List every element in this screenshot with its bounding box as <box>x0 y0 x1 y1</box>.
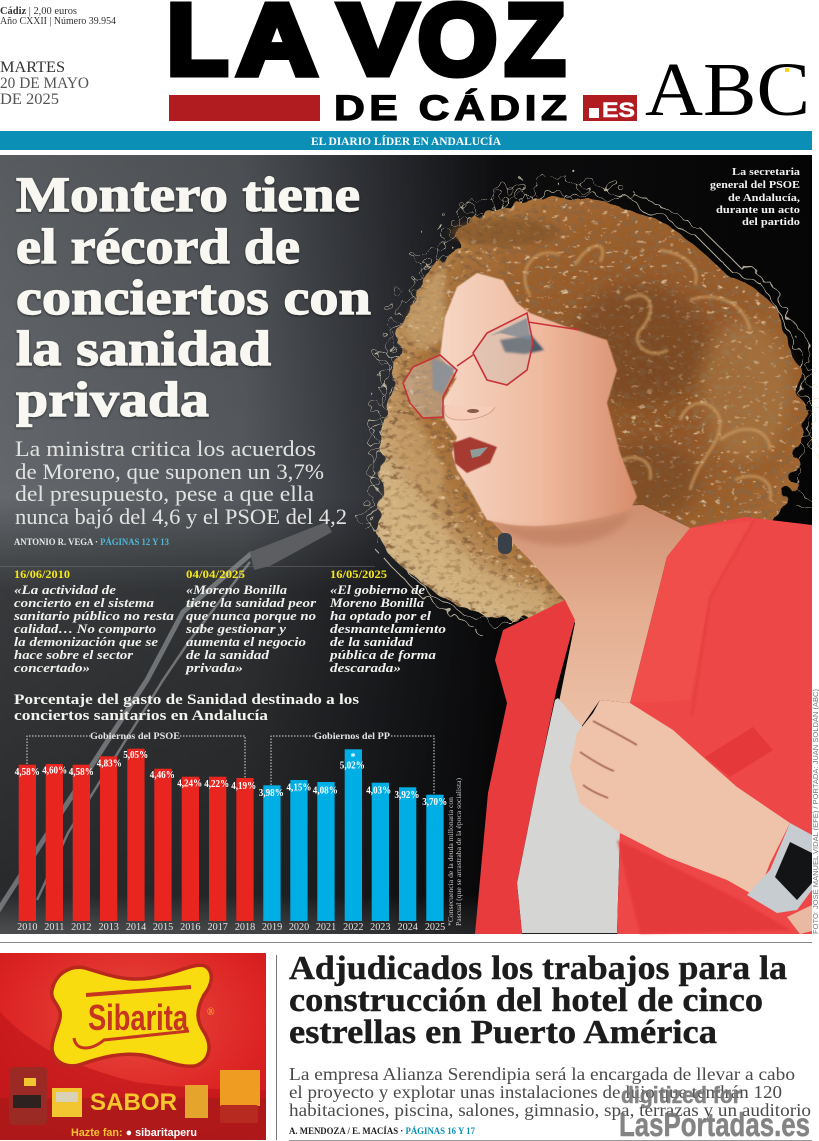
standfirst: La ministra critica los acuerdos <box>15 436 316 461</box>
year axis: 2013 <box>99 922 119 933</box>
panel: main story photo <box>0 155 814 934</box>
mouth <box>453 437 497 473</box>
nose <box>444 405 495 420</box>
quote 2: tiene la sanidad peor <box>186 595 317 610</box>
year axis: 2021 <box>316 922 336 933</box>
panel: Sibarita advert <box>0 953 266 1140</box>
glasses <box>403 313 580 418</box>
advert logo <box>52 965 215 1066</box>
logo: de Cádiz: DE CÁDIZ <box>334 89 567 128</box>
advert social line: Hazte fan: ● sibaritaperu <box>71 1127 197 1139</box>
neck and chest <box>480 505 690 733</box>
year axis: 2016 <box>180 922 200 933</box>
headline: privada <box>16 371 209 427</box>
jacket left <box>475 600 575 934</box>
blue bars <box>263 749 444 921</box>
advert logo: ® <box>207 1007 215 1018</box>
smartwatch <box>747 823 812 934</box>
portrait <box>366 182 814 934</box>
hand <box>570 700 790 897</box>
photo caption: general del PSOE <box>710 179 800 191</box>
date: 20 DE MAYO <box>0 75 89 92</box>
finger creases <box>580 721 637 798</box>
advert products <box>9 1067 260 1125</box>
photo caption: durante un acto <box>716 204 801 216</box>
year axis: 2019 <box>262 922 282 933</box>
value labels: 4,60% <box>42 766 67 776</box>
year axis: 2017 <box>208 922 228 933</box>
quote 3: «El gobierno de <box>330 582 425 597</box>
chart heading: Porcentaje del gasto de Sanidad destinado a los <box>14 692 359 708</box>
quote 1: concertado» <box>14 660 90 675</box>
headline <box>16 166 371 427</box>
jacket right <box>600 517 812 934</box>
quote 1: 16/06/2010 <box>14 569 70 581</box>
tagline band <box>0 131 812 150</box>
quote 3: descarada» <box>330 660 401 675</box>
quote 2: aumenta el negocio <box>186 634 307 649</box>
year axis: 2010 <box>17 922 37 933</box>
year axis: 2020 <box>289 922 309 933</box>
story standfirst: La empresa Alianza Serendipia será la encargada de llevar a cabo <box>289 1064 795 1084</box>
story headline <box>289 950 787 1051</box>
year axis: 2011 <box>44 922 64 933</box>
quote 2: de la sanidad <box>186 647 270 662</box>
quote 1: sanitario público no resta <box>13 608 175 623</box>
quote 2: sabe gestionar y <box>185 621 286 636</box>
headline: conciertos con <box>16 269 371 325</box>
story headline: estrellas en Puerto América <box>289 1014 717 1051</box>
value labels: 4,03% <box>366 786 391 796</box>
logo: red bar <box>169 95 320 121</box>
earring <box>498 533 512 554</box>
value labels: 3,92% <box>394 790 420 801</box>
watermark <box>619 1082 810 1141</box>
story standfirst: habitaciones, piscina, salones, gimnasio, spa, terrazas y un auditorio <box>289 1100 811 1120</box>
value labels: 4,15% <box>286 782 312 794</box>
value labels: 4,08% <box>313 786 338 796</box>
story byline: A. MENDOZA / E. MACÍAS · PÁGINAS 16 Y 17 <box>289 1126 475 1136</box>
value labels: 3,98% <box>259 788 284 799</box>
quote 2: privada» <box>185 660 243 675</box>
year axis <box>17 922 445 933</box>
byline: ANTONIO R. VEGA · PÁGINAS 12 Y 13 <box>14 537 169 547</box>
quote 1: la demonización que se <box>14 634 158 649</box>
quote 3 <box>329 569 447 675</box>
year axis: 2025 <box>425 922 445 933</box>
year axis: 2022 <box>343 922 363 933</box>
hair shadows and highlights <box>384 218 790 613</box>
advert slogan: SABOR <box>90 1089 177 1116</box>
date <box>0 59 89 108</box>
photo caption: de Andalucía, <box>728 192 800 204</box>
quote 1 <box>13 569 175 675</box>
divider <box>289 1140 812 1141</box>
tagline band: EL DIARIO LÍDER EN ANDALUCÍA <box>311 134 502 148</box>
shirt <box>517 698 620 933</box>
headline: el récord de <box>16 218 300 274</box>
value labels: 4,83% <box>97 758 122 770</box>
value labels: 4,24% <box>177 778 202 790</box>
standfirst: de Moreno, que suponen un 3,7% <box>15 459 324 484</box>
story headline: construcción del hotel de cinco <box>289 982 763 1019</box>
quote 3: Moreno Bonilla <box>329 595 425 610</box>
secondary story <box>289 950 811 1136</box>
year axis: 2012 <box>71 922 91 933</box>
quote 2 <box>185 569 317 675</box>
headline: Montero tiene <box>16 166 360 222</box>
edition info: Cádiz | 2,00 euros <box>0 6 77 17</box>
quote 1: «La actividad de <box>14 582 116 597</box>
masthead <box>0 0 810 132</box>
jacket lapel and pocket <box>617 521 790 934</box>
value labels: 5,02% <box>340 760 365 772</box>
bracket: PSOE governments <box>27 732 245 778</box>
logo: .es badge: ES <box>602 99 635 122</box>
quote 3: de la sanidad <box>330 634 414 649</box>
face <box>440 273 637 526</box>
value labels <box>15 750 447 808</box>
watermark: digitized for <box>621 1082 741 1108</box>
story headline: Adjudicados los trabajos para la <box>289 950 787 987</box>
quote 3: ha optado por el <box>330 608 431 623</box>
value labels: 4,58% <box>69 767 94 778</box>
value labels: 5,05% <box>123 750 148 761</box>
quote 3: 16/05/2025 <box>330 569 387 581</box>
quote 3: desmantelamiento <box>330 621 447 636</box>
divider <box>0 942 812 943</box>
red bars <box>19 749 254 921</box>
value labels: * <box>350 752 356 763</box>
year axis: 2018 <box>235 922 255 933</box>
quote 1: hace sobre el sector <box>14 647 134 662</box>
logo: La Voz <box>167 0 565 96</box>
bar chart <box>15 732 463 933</box>
quote 2: que nunca porque no <box>186 608 317 623</box>
footnote: Pascual (que se arrastraba de la época socialista) <box>455 777 463 926</box>
logo: .es badge <box>583 95 637 122</box>
value labels: 3,70% <box>422 797 447 808</box>
bracket: PP governments: Gobiernos del PP <box>314 732 390 742</box>
advert logo: Sibarita <box>88 997 189 1038</box>
year axis: 2023 <box>370 922 390 933</box>
quote 2: «Moreno Bonilla <box>186 582 288 597</box>
value labels: 4,46% <box>150 770 175 781</box>
story standfirst: el proyecto y explotar unas instalaciones de lujo que tendrán 120 <box>289 1082 782 1102</box>
edition info <box>0 6 117 27</box>
standfirst <box>15 436 347 529</box>
footnote: *Consecuencia de la deuda millonaria con <box>447 796 455 926</box>
quote 2: 04/04/2025 <box>186 569 245 581</box>
quote 1: concierto en el sistema <box>14 595 155 610</box>
logo: ABC: ABC <box>645 48 810 132</box>
value labels: 4,22% <box>204 779 229 790</box>
footnote <box>447 777 463 926</box>
value labels: 4,58% <box>15 767 40 778</box>
date: MARTES <box>0 59 65 76</box>
bracket: PP governments <box>271 732 434 795</box>
date: DE 2025 <box>0 91 59 108</box>
quote 1: calidad… No comparto <box>14 621 157 636</box>
chart heading <box>14 692 359 724</box>
quote 3: pública de forma <box>329 647 437 662</box>
divider <box>276 955 277 1140</box>
headline: la sanidad <box>16 320 271 376</box>
year axis: 2014 <box>126 922 146 933</box>
microphone <box>0 522 332 914</box>
chart heading: conciertos sanitarios en Andalucía <box>14 708 269 724</box>
jaw shadow <box>495 512 632 545</box>
year axis: 2024 <box>398 922 418 933</box>
value labels: 4,19% <box>231 781 256 792</box>
photo caption: del partido <box>742 216 801 228</box>
year axis: 2015 <box>153 922 173 933</box>
hair wisps <box>366 182 814 628</box>
standfirst: del presupuesto, pese a que ella <box>15 481 314 506</box>
standfirst: nunca bajó del 4,6 y el PSOE del 4,2 <box>15 504 347 529</box>
story standfirst <box>289 1064 811 1120</box>
hair mass <box>380 198 802 619</box>
bracket: PSOE governments: Gobiernos del PSOE <box>90 732 180 742</box>
edition info: Año CXXII | Número 39.954 <box>0 16 117 27</box>
photo caption: La secretaria <box>732 166 801 178</box>
photo caption <box>710 166 801 228</box>
